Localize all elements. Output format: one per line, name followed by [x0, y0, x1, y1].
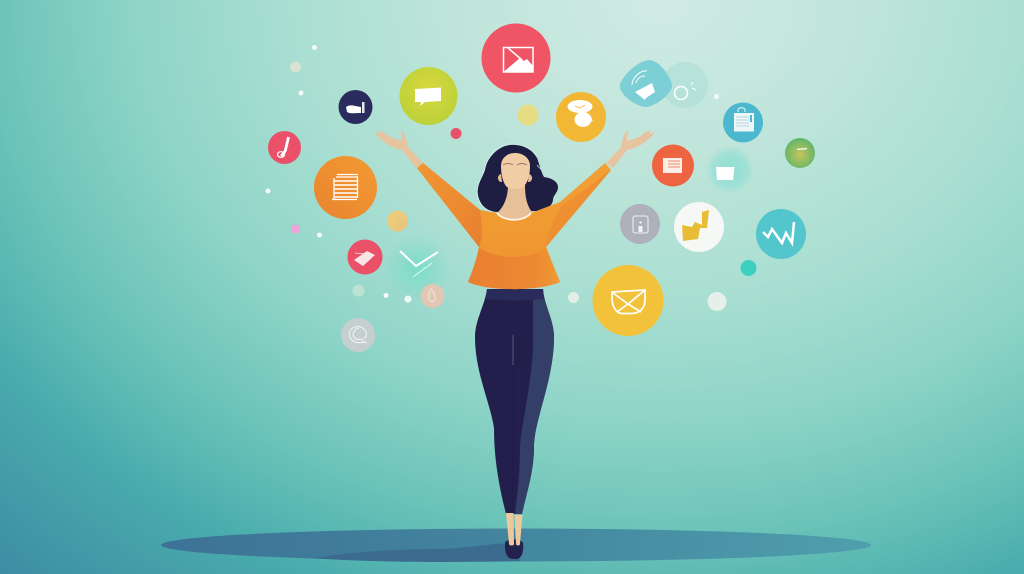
icon: teal rounded square with bell [620, 60, 672, 107]
sweater body and sleeves [417, 163, 611, 289]
pants [475, 289, 554, 514]
right leg foot [514, 515, 522, 546]
icon: yellow envelope [592, 265, 664, 336]
icon: red notepad [348, 240, 382, 274]
left sleeve shading [417, 163, 482, 247]
icon: orange list document [314, 156, 377, 219]
floor shadow [161, 528, 871, 562]
hair curl highlight [537, 165, 555, 180]
face [501, 153, 530, 189]
icon: beige drop [420, 284, 444, 308]
left hand and forearm [374, 129, 423, 168]
icon: green orb [785, 138, 815, 168]
icon: red picture [482, 24, 550, 92]
small decorative dots [266, 45, 756, 311]
hair highlight [477, 144, 537, 212]
hair [478, 145, 558, 212]
icon: red-orange browser window [652, 144, 694, 186]
ears [498, 174, 532, 182]
right hand and forearm [606, 129, 655, 168]
shoes [505, 539, 523, 559]
icon: lime chat bubble [400, 67, 458, 125]
icon: glowing check mark [383, 234, 451, 302]
icon: glowing mint card [705, 145, 755, 195]
icon: grey device [620, 204, 660, 244]
eyebrows [503, 164, 527, 165]
waistband [486, 289, 544, 300]
sweater hem panel [468, 247, 560, 289]
woman figure [374, 129, 655, 559]
neckline [497, 213, 531, 220]
icon: blue shopping bag document [723, 102, 763, 142]
neck [497, 185, 533, 224]
icon: white badge with yellow zigzag [674, 202, 724, 252]
icon: red music note [268, 131, 301, 164]
icon: pale glow circle ring [662, 62, 708, 108]
pants highlight [515, 289, 554, 514]
left leg foot [506, 513, 514, 546]
icon: navy hand [338, 90, 372, 124]
icon: teal chart zigzag [756, 209, 806, 259]
icon: grey spiral [341, 318, 375, 352]
pants centre line [512, 335, 514, 514]
icon: yellow dog [556, 92, 606, 142]
right sleeve shading [546, 170, 611, 247]
